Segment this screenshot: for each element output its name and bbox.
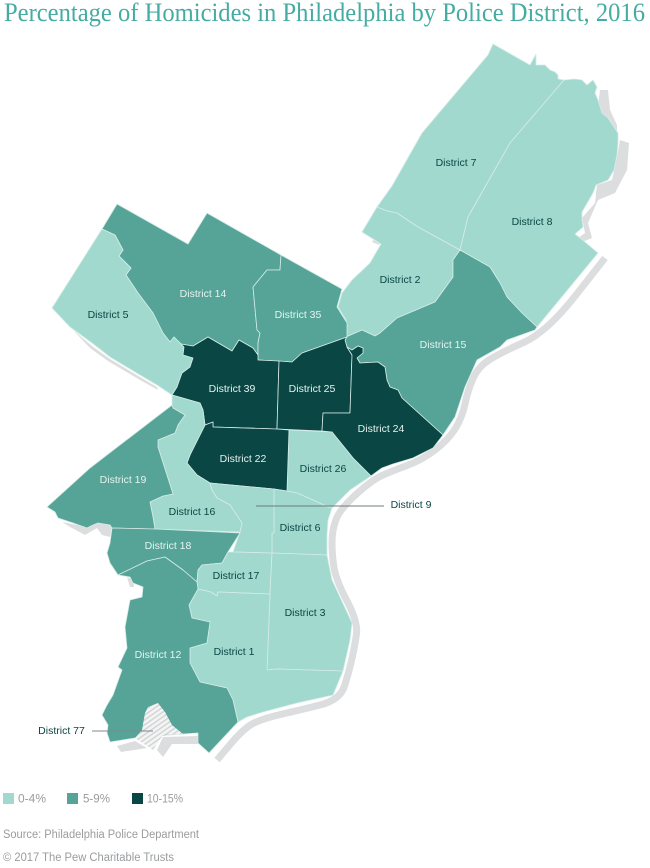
district 2: [338, 207, 460, 337]
legend item 10-15%: [132, 793, 183, 806]
district 22: [187, 422, 289, 491]
legend item 5-9%: 5-9%: [83, 794, 110, 806]
district 35: District 35: [275, 309, 321, 321]
district 18: District 18: [145, 540, 191, 552]
district 5: District 5: [88, 309, 129, 321]
district 39: [172, 337, 279, 429]
district 1: District 1: [214, 646, 255, 658]
map of Philadelphia police districts: [47, 44, 629, 760]
district 19: District 19: [100, 474, 146, 486]
district 5: [52, 229, 193, 395]
district 15: District 15: [420, 339, 466, 351]
district 39: District 39: [209, 383, 255, 395]
district 22: District 22: [220, 453, 266, 465]
district 16: [150, 395, 242, 532]
district 77 callout: [38, 725, 153, 737]
district 12: District 12: [135, 649, 181, 661]
district 16: District 16: [169, 506, 215, 518]
district 6: District 6: [280, 522, 321, 534]
legend item 0-4%: 0-4%: [18, 794, 46, 806]
district 25: District 25: [289, 383, 335, 395]
district 19: [47, 405, 185, 529]
district 17: District 17: [213, 570, 259, 582]
district 6: [272, 489, 332, 555]
district 7: District 7: [436, 157, 477, 169]
district 12: [102, 557, 238, 753]
district 3: [267, 553, 352, 671]
district 17: [197, 552, 272, 596]
district 1: [189, 589, 343, 722]
district 77 callout: District 77: [38, 725, 85, 737]
copyright note: © 2017 The Pew Charitable Trusts: [3, 852, 174, 864]
district 8: District 8: [512, 216, 553, 228]
legend item 10-15%: 10-15%: [147, 794, 183, 806]
district 3: District 3: [285, 607, 326, 619]
district 24: District 24: [358, 423, 404, 435]
district 35: [253, 255, 347, 362]
district 26: [287, 430, 371, 508]
district 24: [322, 346, 443, 476]
legend item 5-9%: [67, 793, 110, 806]
source note: Source: Philadelphia Police Department: [3, 829, 200, 841]
district 8: [460, 79, 618, 327]
district 26: District 26: [300, 463, 346, 475]
district 14: [102, 204, 281, 355]
district 2: District 2: [380, 274, 421, 286]
district 9 callout: District 9: [391, 499, 432, 511]
legend item 0-4%: [3, 793, 46, 806]
district 77 hatched area: [135, 703, 183, 750]
district 25: [277, 337, 352, 431]
district 9: [210, 483, 274, 553]
district 7: [377, 44, 564, 250]
district 14: District 14: [180, 288, 226, 300]
district 18: [107, 528, 240, 582]
legend: [3, 793, 183, 806]
river shadow: [62, 65, 629, 760]
district 15: [345, 250, 537, 435]
